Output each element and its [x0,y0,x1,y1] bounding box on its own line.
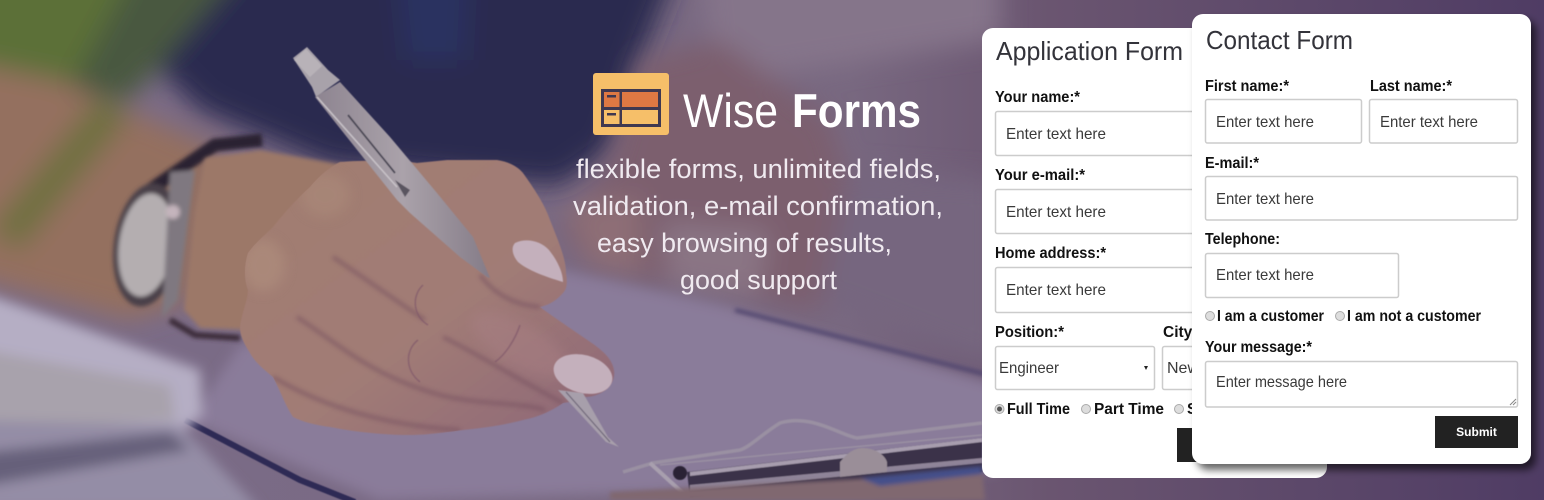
customer radio options [1206,308,1481,325]
employment radio options: S [1187,401,1197,418]
application form heading: Application Form [996,36,1183,66]
clipboard clip [623,421,982,497]
field: telephone [1205,231,1398,298]
field: home address: Enter text here [1006,282,1106,299]
field: first name: First name:* [1205,78,1290,95]
application submit button [1177,428,1277,462]
feature tagline: validation, e-mail confirmation, [573,191,943,221]
feature tagline: good support [680,265,837,295]
field: message: Your message:* [1205,339,1313,356]
brand name [683,84,921,137]
field: home address: Home address:* [995,245,1107,262]
feature tagline [573,154,943,295]
finger shading [241,173,579,430]
field: your e-mail: Your e-mail:* [995,167,1086,184]
blurred notebook at lower left [0,285,260,500]
thumb and index fingernails [513,240,617,400]
field: city select [1162,324,1292,390]
tabletop strip below clipboard [610,466,985,500]
contact submit button: Submit [1456,425,1497,439]
feature tagline: flexible forms, unlimited fields, [576,154,941,184]
panel: application form [982,28,1327,478]
feature tagline: easy browsing of results, [597,228,892,258]
field: your e-mail: Enter text here [1006,204,1106,221]
blurred shirt and plant background [0,0,680,320]
employment radio options: Full Time [1007,401,1070,418]
customer radio options: I am a customer [1217,308,1324,325]
wrist watch [106,140,262,338]
field: e-mail: Enter text here [1216,191,1314,208]
field: telephone: Enter text here [1216,267,1314,284]
field: position select: Engineer [999,360,1060,377]
field: last name: Enter text here [1380,114,1478,131]
customer radio options: I am not a customer [1347,308,1481,325]
blurred rear hand and desk [560,0,1000,370]
forearm between watch and hand [184,150,345,330]
field: home address [995,245,1296,312]
field: your name: Enter text here [1006,126,1106,143]
field: position select: Position:* [995,324,1065,341]
field: your name: Your name:* [995,89,1081,106]
clipboard edge lines [185,310,1000,500]
brand name: Wise [683,84,778,137]
field: last name: Last name:* [1370,78,1453,95]
ballpoint pen [293,47,619,447]
field: message [1205,339,1518,407]
panel: contact form [1192,14,1531,464]
field: e-mail [1205,155,1518,220]
paper sheet [190,270,1000,500]
field: city select: City [1163,324,1193,341]
field: e-mail: E-mail:* [1205,155,1260,172]
contact submit button [1435,416,1518,448]
logo icon [593,73,669,135]
field: telephone: Telephone: [1205,231,1280,248]
employment radio options [995,401,1197,418]
brand name: Forms [792,84,921,137]
employment radio options: Part Time [1094,401,1164,418]
field: last name [1370,78,1518,143]
field: first name [1205,78,1362,143]
field: position select [995,324,1154,390]
field: your e-mail [995,167,1296,234]
field: city select: New [1167,360,1199,377]
field: message: Enter message here [1216,374,1347,391]
contact form heading: Contact Form [1206,25,1353,55]
field: first name: Enter text here [1216,114,1314,131]
writing hand [240,160,614,435]
field: your name [995,89,1296,156]
